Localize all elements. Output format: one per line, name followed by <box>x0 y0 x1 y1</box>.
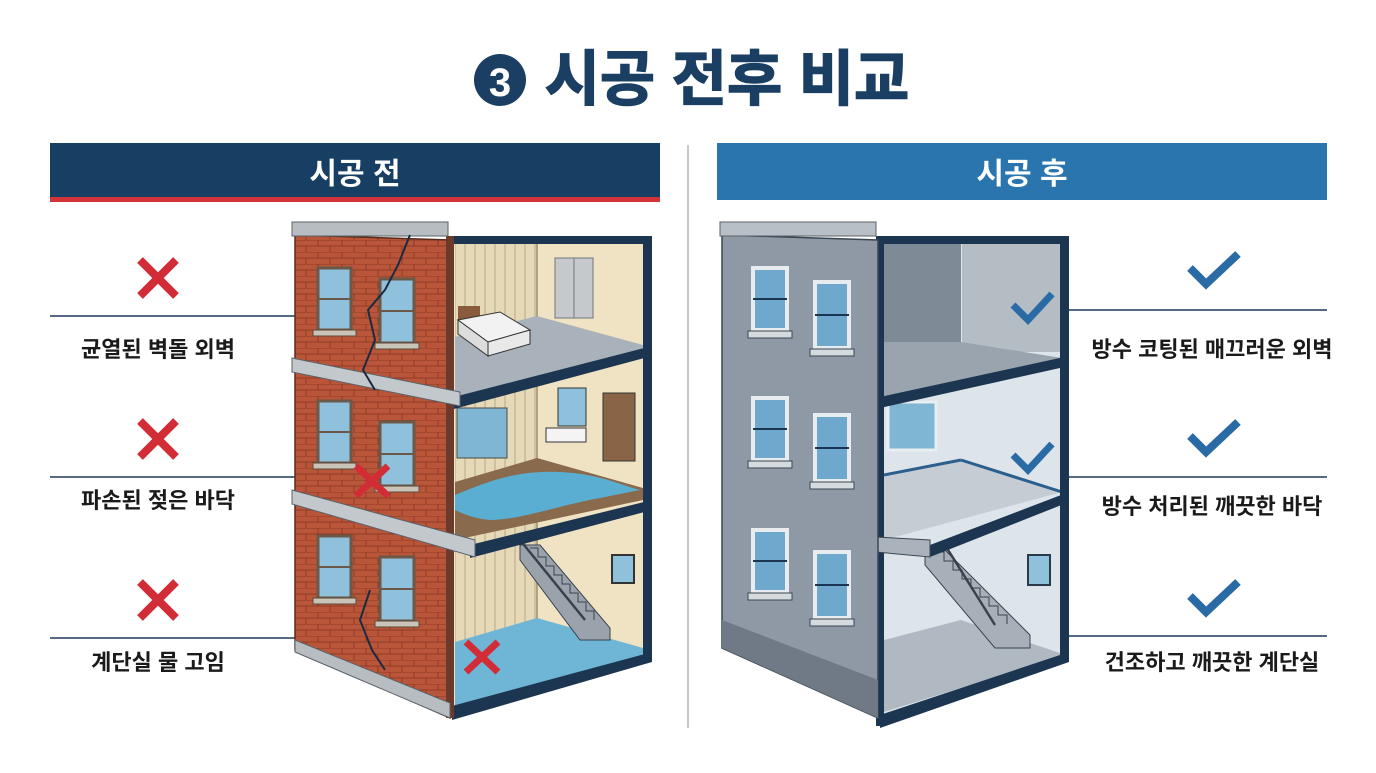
panel: before labels <box>50 260 310 675</box>
ground floor water <box>455 618 643 712</box>
illustration: damaged building <box>292 222 652 720</box>
middle room window/door <box>457 408 507 458</box>
title: 3 <box>489 61 511 105</box>
icon: x mark 3 <box>140 582 176 618</box>
text: cracked brick: 균열된 벽돌 외벽 <box>81 337 235 362</box>
interior <box>882 240 1068 725</box>
text: stair water: 계단실 물 고임 <box>91 650 225 675</box>
slabs <box>292 358 460 406</box>
title: 시공 전후 비교 <box>545 46 909 113</box>
icon: x mark 2 <box>140 421 176 457</box>
stairs <box>520 540 610 640</box>
bed <box>458 306 530 356</box>
icon: red x wall <box>356 466 388 496</box>
icon: check 3 <box>1190 582 1238 612</box>
text: coated wall: 방수 코팅된 매끄러운 외벽 <box>1092 337 1332 362</box>
top room floor <box>455 316 643 400</box>
header: after <box>717 143 1327 200</box>
text: wet floor: 파손된 젖은 바닥 <box>81 488 235 513</box>
header: after: 시공 후 <box>976 158 1068 191</box>
panel: after labels <box>1065 254 1332 675</box>
navy frame <box>876 236 1069 728</box>
navy frame <box>448 236 652 720</box>
cracks <box>363 235 410 390</box>
checks inside <box>1013 294 1052 470</box>
icon: x mark 1 <box>140 260 176 296</box>
grey front face <box>722 235 878 718</box>
stairs <box>925 545 1030 648</box>
header: before <box>50 143 660 202</box>
windows <box>318 268 414 621</box>
header: before: 시공 전 <box>309 158 401 191</box>
icon: red x ground <box>466 642 498 672</box>
text: dry stairwell: 건조하고 깨끗한 계단실 <box>1105 650 1319 675</box>
middle floor with water <box>455 458 643 540</box>
illustration: repaired building <box>720 222 1069 728</box>
icon: check 2 <box>1190 422 1238 452</box>
brick front face <box>295 235 450 718</box>
text: clean floor: 방수 처리된 깨끗한 바닥 <box>1102 494 1322 519</box>
icon: check 1 <box>1190 254 1238 284</box>
interior walls <box>452 240 648 718</box>
divider <box>687 145 689 728</box>
window small ground <box>612 555 634 583</box>
